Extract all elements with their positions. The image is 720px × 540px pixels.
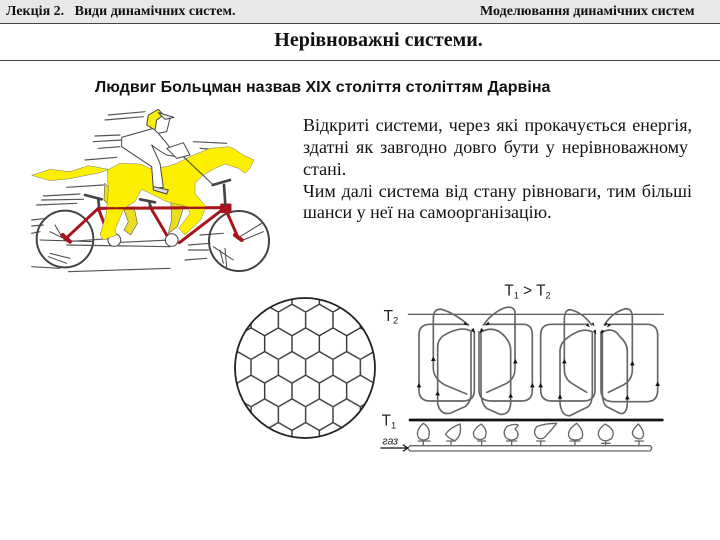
label T1 > T2: 2 xyxy=(545,290,551,300)
handlebars and seats xyxy=(85,180,230,207)
label T1: T xyxy=(382,413,391,430)
title rule xyxy=(0,60,720,61)
wheels xyxy=(37,211,269,271)
subheading: Людвиг Больцман назвав XIX століття століттям Дарвіна xyxy=(95,79,550,96)
label T1 > T2: T xyxy=(504,283,514,300)
body text: здатні як завгодно довго бути у нерівноважному xyxy=(303,137,688,157)
bicycle frame xyxy=(63,205,242,243)
label T1 > T2: > T xyxy=(519,283,546,300)
body text: Чим далі система від стану рівноваги, тим більші xyxy=(303,181,692,201)
label T2: T xyxy=(384,308,393,325)
lower plate xyxy=(410,416,662,424)
body text: стані. xyxy=(303,159,346,179)
course label: Моделювання динамічних систем xyxy=(480,4,695,19)
body text: Відкриті системи, через які прокачується енергія, xyxy=(303,115,692,135)
body text xyxy=(303,115,692,222)
convection rolls xyxy=(419,307,658,416)
label gas: газ xyxy=(382,435,398,447)
drivetrain xyxy=(67,234,178,247)
upper plate xyxy=(408,313,663,316)
title: Нерівноважні системи. xyxy=(274,29,483,51)
frame over horse xyxy=(98,204,223,212)
horse hind legs xyxy=(104,183,184,235)
horse body and tail xyxy=(32,147,254,240)
label T2: 2 xyxy=(393,316,398,326)
hexagon disc xyxy=(235,298,375,438)
label T1: 1 xyxy=(391,420,396,430)
diagram: convection rolls between plates xyxy=(380,283,664,452)
flow arrowheads xyxy=(417,322,660,399)
header band xyxy=(0,0,720,24)
speed lines xyxy=(32,112,227,272)
rider xyxy=(122,109,213,194)
body text: шанси у неї на самоорганізацію. xyxy=(303,202,552,222)
illustration: horse riding a tandem bicycle xyxy=(31,108,270,272)
lecture label: Лекція 2. Види динамічних систем. xyxy=(6,4,236,19)
illustration: Benard hexagonal cells xyxy=(234,297,376,439)
label T1 > T2: 1 xyxy=(514,290,519,300)
burners xyxy=(381,423,652,451)
